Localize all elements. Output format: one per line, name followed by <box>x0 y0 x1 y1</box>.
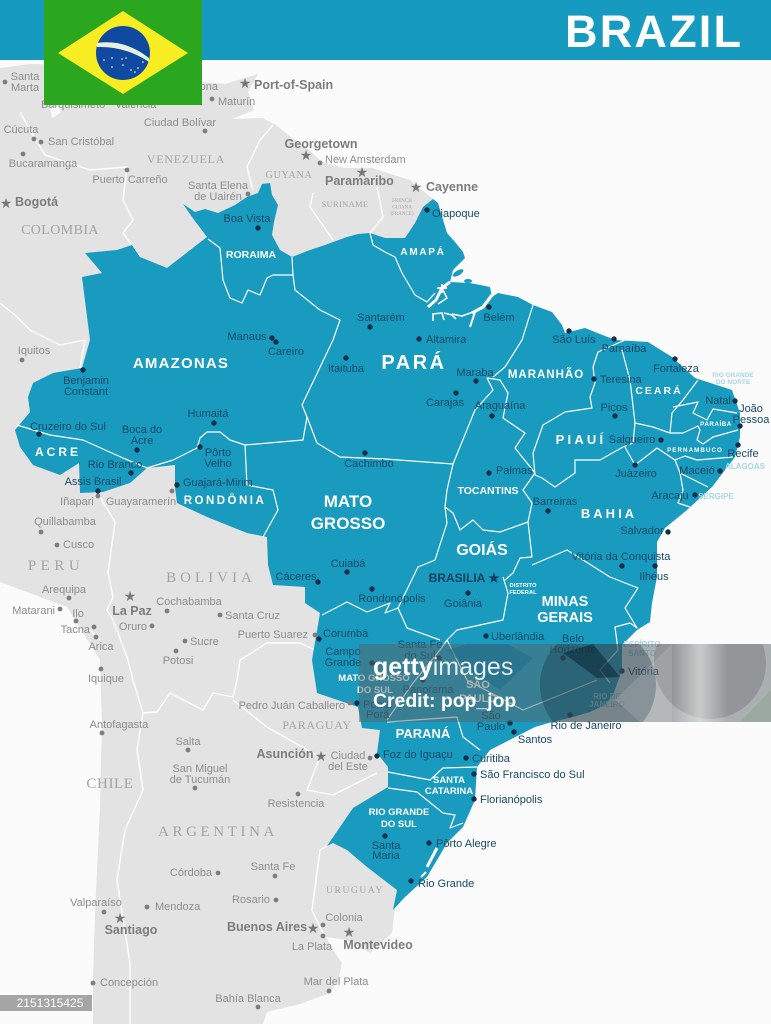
labels: neighbouring capitals: ★ <box>356 165 368 181</box>
labels: neighbouring cities: Santa Fe <box>251 861 295 873</box>
labels: Brazilian cities: Vitória da Conquista <box>572 551 671 563</box>
labels: Brazilian states: FEDERAL <box>509 590 537 596</box>
labels: neighbouring cities: Ciudad <box>331 750 365 762</box>
labels: Brazilian states: DISTRITO <box>510 583 537 589</box>
labels: neighbouring cities: de Uairén <box>194 191 242 203</box>
labels: Brazilian states: RIO DE <box>593 692 621 701</box>
labels: neighbouring country names: COLOMBIA <box>21 223 99 238</box>
labels: Brazilian states: ESPÍRITO <box>623 640 661 649</box>
labels: Brazilian cities: Santa Fe <box>398 639 442 651</box>
labels: neighbouring cities: Arequipa <box>42 584 87 596</box>
labels: Brazilian states: MINAS <box>542 594 589 610</box>
map: Brazil with state borders <box>15 183 740 910</box>
labels: neighbouring capitals: Port-of-Spain <box>254 78 333 92</box>
labels: Brazilian states: PARÁ <box>381 351 447 374</box>
labels: Brazilian cities: Juàzeiro <box>615 468 657 480</box>
labels: neighbouring cities: Mar del Plata <box>304 976 369 988</box>
labels: Brazilian cities: Manaus <box>227 331 267 343</box>
labels: Brazilian cities: Pôrto Alegre <box>436 838 497 850</box>
labels: neighbouring cities: Puerto Suarez <box>238 629 308 641</box>
labels: Brazilian cities: Pessoa <box>733 414 770 426</box>
labels: neighbouring cities: Córdoba <box>170 867 213 879</box>
Brazil land shape <box>15 183 740 910</box>
labels: neighbouring cities: Santa <box>11 71 40 83</box>
labels: Brazilian cities: Altamira <box>426 334 467 346</box>
state borders <box>17 233 738 828</box>
labels: neighbouring cities: Maturín <box>218 96 255 108</box>
labels: Brazilian cities: Santa <box>372 840 401 852</box>
labels: neighbouring cities: Bucaramanga <box>9 158 78 170</box>
labels: Brazilian cities: São Luís <box>552 334 596 346</box>
labels: neighbouring country names: PERU <box>28 558 84 574</box>
labels: Brazilian cities: Acre <box>131 435 153 447</box>
labels: neighbouring country names: FRENCH <box>392 199 412 204</box>
labels: Brazilian cities: Foz do Iguaçu <box>383 749 453 761</box>
labels: neighbouring capitals: Asunción <box>257 747 313 761</box>
labels: Brazilian cities: Recife <box>727 448 759 460</box>
labels: Brazilian cities: Corumbá <box>323 628 369 640</box>
labels: neighbouring cities: Resistencia <box>268 798 325 810</box>
labels: neighbouring capitals: ★ <box>343 925 355 941</box>
labels: neighbouring cities <box>3 71 406 1009</box>
labels: neighbouring cities: Mendoza <box>155 901 201 913</box>
labels: neighbouring capitals: ★ <box>239 76 251 92</box>
labels: neighbouring country names: BOLIVIA <box>166 570 256 586</box>
labels: Brazilian states: CATARINA <box>425 786 473 797</box>
labels: neighbouring capitals: ★ <box>114 911 126 927</box>
labels: Brazilian cities: Boca do <box>122 424 162 436</box>
labels: neighbouring cities: Iquitos <box>18 345 51 357</box>
labels: Brazilian cities: Araguaína <box>475 400 526 412</box>
labels: Brazilian states: PERNAMBUCO <box>667 447 723 454</box>
labels: Brazilian cities: Santarém <box>357 312 405 324</box>
labels: neighbouring cities: Santa Elena <box>188 180 249 192</box>
labels: neighbouring cities: Ilo <box>72 608 84 620</box>
labels: Brazilian states: RIO GRANDE <box>369 807 429 818</box>
labels: Brazilian cities: Vitória <box>628 666 660 678</box>
labels: Brazilian states: CEARÁ <box>635 384 683 397</box>
labels: Brazilian cities: Palmas <box>496 465 533 477</box>
labels: Brazilian states: ALAGOAS <box>725 462 766 471</box>
labels: neighbouring cities: New Amsterdam <box>325 154 406 166</box>
labels: Brazilian states: GOIÁS <box>456 540 508 559</box>
labels: neighbouring country names: VENEZUELA <box>147 152 225 166</box>
labels: Brazilian states: DO SUL <box>381 819 417 830</box>
labels: Brazilian cities: Santos <box>518 734 553 746</box>
labels: Brazilian states: PAULO <box>459 693 497 705</box>
labels: Brazilian cities: Curitiba <box>472 753 511 765</box>
labels: Brazilian cities: Rondonópolis <box>358 593 426 605</box>
labels: Brazilian cities: João <box>739 403 763 415</box>
labels: Brazilian states: MARANHÃO <box>508 368 584 381</box>
labels: neighbouring capitals: Georgetown <box>285 137 357 151</box>
labels: Brazilian cities: Pôrto <box>205 447 231 459</box>
labels: Brazilian cities: Belém <box>483 312 515 324</box>
labels: Brazilian cities: Cruzeiro do Sul <box>30 421 106 433</box>
labels: Brazilian states: JANEIRO <box>589 700 625 709</box>
labels: neighbouring cities: Barcelona <box>168 81 219 93</box>
labels: neighbouring cities: Santa Cruz <box>225 610 280 622</box>
labels: Brazilian states <box>35 245 766 830</box>
image id tag: 2151315425 <box>17 996 84 1010</box>
labels: neighbouring cities: Matarani <box>12 605 55 617</box>
labels: Brazilian cities: Guajará-Mirim <box>183 477 253 489</box>
labels: Brazilian cities: Constant <box>64 386 108 398</box>
labels: neighbouring capitals: Montevideo <box>343 938 413 952</box>
labels: Brazilian states: SÃO <box>466 678 490 691</box>
labels: neighbouring capitals: Cayenne <box>426 180 478 194</box>
labels: Brazilian cities: Oiapoque <box>432 208 480 220</box>
labels: Brazilian cities: Horizonte <box>549 644 597 656</box>
labels: Brazilian states: RORAIMA <box>226 249 276 261</box>
labels: Brazilian states: DO NORTE <box>716 379 751 386</box>
labels: neighbouring capitals: Bogotá <box>15 195 58 209</box>
labels: Brazilian cities: Rio Branco <box>88 459 142 471</box>
labels: neighbouring cities: La Plata <box>292 941 333 953</box>
labels: Brazilian cities: Boa Vista <box>224 213 271 225</box>
labels: neighbouring country names: CHILE <box>86 776 134 792</box>
labels: Brazilian cities: Careiro <box>268 346 304 358</box>
labels: Brazilian states: MATO GROSSO <box>338 673 410 684</box>
labels: neighbouring capitals: Santiago <box>105 923 158 937</box>
labels: Brazilian states: SERGIPE <box>698 492 734 501</box>
labels: Brazilian cities: Assis Brasil <box>65 476 121 488</box>
labels: Brazilian cities: Cáceres <box>276 571 317 583</box>
labels: Brazilian cities: São <box>481 710 501 722</box>
labels: Brazilian cities: Ponta <box>363 699 393 711</box>
labels: neighbouring cities: Colonia <box>325 912 364 924</box>
labels: neighbouring cities: Arica <box>88 641 114 653</box>
map: neighbouring countries land <box>0 64 447 1024</box>
watermark logo: gettyimages <box>373 653 513 681</box>
labels: neighbouring country names: PARAGUAY <box>282 718 352 732</box>
top banner <box>0 0 771 60</box>
labels: neighbouring cities: Rosario <box>232 894 270 906</box>
labels: neighbouring country names: GUYANA <box>265 170 313 181</box>
labels: neighbouring cities: Tacna <box>61 624 91 636</box>
labels: neighbouring capitals: Paramaribo <box>325 174 394 188</box>
labels: Brazilian cities: Goiânia <box>444 598 483 610</box>
labels: Brazilian cities: Campo <box>325 646 361 658</box>
labels: neighbouring cities: del Este <box>328 761 368 773</box>
labels: Brazilian cities: Maceió <box>679 465 715 477</box>
labels: neighbouring cities: Ciudad Bolívar <box>144 117 216 129</box>
labels: Brazilian cities: Carajas <box>426 397 464 409</box>
labels: neighbouring country names: ARGENTINA <box>158 824 278 840</box>
labels: neighbouring cities: Valencia <box>115 99 157 111</box>
labels: Brazilian cities: Uberlândia <box>491 631 545 643</box>
labels: neighbouring cities: Potosi <box>163 655 193 667</box>
labels: Brazilian cities: Humaitá <box>188 408 229 420</box>
watermark overlay shapes <box>448 644 771 722</box>
labels: Brazilian cities: Itaituba <box>328 363 365 375</box>
labels: Brazilian states: MATO <box>324 492 372 511</box>
labels: Brazilian cities: do Sul <box>404 650 436 662</box>
labels: neighbouring capitals <box>0 76 478 952</box>
watermark band <box>359 644 771 722</box>
labels: neighbouring cities: Concepción <box>100 977 158 989</box>
Amazon delta and lagoons <box>421 282 492 877</box>
labels: Brazilian cities: Belo <box>562 633 584 645</box>
labels: Brazilian cities: Paulo <box>477 721 505 733</box>
labels: Brazilian states: DO SUL <box>357 685 393 696</box>
labels: neighbouring cities: Cúcuta <box>4 124 39 136</box>
labels: neighbouring cities: Iñapari <box>60 496 94 508</box>
labels: Brazilian cities: Barreiras <box>533 496 578 508</box>
labels: Brazilian cities: Maria <box>372 850 401 862</box>
title: BRAZIL <box>565 6 741 57</box>
labels: neighbouring cities: Salta <box>175 736 201 748</box>
labels: Brazilian cities: Picos <box>601 402 628 414</box>
labels: Brazilian cities: Florianópolis <box>480 794 543 806</box>
labels: neighbouring capitals: ★ <box>307 921 319 937</box>
labels: neighbouring cities: Guayaramerín <box>106 496 176 508</box>
labels: Brazilian states: PIAUÍ <box>556 432 606 447</box>
labels: neighbouring country names: SURINAME <box>322 199 368 209</box>
labels: neighbouring cities: Valparaíso <box>70 897 122 909</box>
labels: Brazilian states: GROSSO <box>311 514 385 533</box>
labels: Brazilian cities: Parnaíba <box>602 343 647 355</box>
labels: neighbouring country names: GUIANA <box>392 206 412 210</box>
labels: neighbouring cities: Iquique <box>88 673 124 685</box>
image id tag <box>0 995 92 1011</box>
labels: Brazilian cities: Maraba <box>456 367 495 379</box>
labels: Brazilian cities <box>30 207 770 890</box>
labels: neighbouring capitals: ★ <box>124 589 136 605</box>
labels: Brazilian states: AMAZONAS <box>133 355 229 372</box>
labels: neighbouring capitals: ★ <box>0 196 12 212</box>
labels: Brazilian cities: Rio Grande <box>418 878 474 890</box>
labels: Brazilian states: SANTO <box>628 649 656 658</box>
labels: Brazilian cities: Aracaju <box>651 490 689 502</box>
labels: Brazilian states: BRASILIA <box>429 571 486 585</box>
labels: neighbouring country names: URUGUAY <box>326 886 384 896</box>
labels: neighbouring cities: Oruro <box>119 621 147 633</box>
labels: Brazilian cities: Cuiabá <box>331 558 366 570</box>
labels: Brazilian cities: Teresina <box>600 374 642 386</box>
labels: neighbouring cities: Marta <box>11 82 40 94</box>
labels: neighbouring capitals: ★ <box>300 148 312 164</box>
labels: neighbouring cities: Quillabamba <box>34 516 97 528</box>
country borders <box>0 112 383 1024</box>
labels: Brazilian states: ACRE <box>35 445 81 459</box>
labels: neighbouring cities: de Tucumán <box>170 774 230 786</box>
labels: neighbouring cities: Puerto Carreño <box>92 174 168 186</box>
labels: Brazilian states: RONDÔNIA <box>184 494 266 507</box>
labels: Brazilian cities: Rio de Janeiro <box>551 720 621 732</box>
labels: Brazilian states: RIO GRANDE <box>712 372 754 379</box>
labels: Brazilian cities: Natal <box>705 395 731 407</box>
labels: Brazilian cities: Ilhéus <box>639 571 669 583</box>
watermark credit: Credit: pop_jop <box>373 690 516 712</box>
labels: Brazilian states: SANTA <box>433 775 465 786</box>
labels: Brazilian states: BAHIA <box>581 506 637 521</box>
labels: Brazilian states: TOCANTINS <box>457 485 519 497</box>
labels: Brazilian states: PARANÁ <box>396 726 451 741</box>
labels: neighbouring cities: Cochabamba <box>156 596 223 608</box>
labels: Brazilian states: GERAIS <box>537 610 593 626</box>
labels: neighbouring capitals: ★ <box>315 749 327 765</box>
labels: neighbouring cities: Sucre <box>190 636 219 648</box>
labels: Brazilian cities: Grande <box>325 657 361 669</box>
labels: neighbouring cities: Cusco <box>63 539 94 551</box>
labels: Brazilian cities: Salvador <box>620 525 664 537</box>
labels: neighbouring capitals: La Paz <box>112 604 152 618</box>
delta islands <box>452 268 472 283</box>
icon: flag of Brazil <box>44 0 202 105</box>
labels: Brazilian cities: São Francisco do Sul <box>480 769 585 781</box>
labels: neighbouring country names <box>21 152 414 896</box>
labels: Brazilian states: ★ <box>487 569 501 587</box>
labels: Brazilian states: PARAÍBA <box>700 419 732 428</box>
labels: Brazilian states: AMAPÁ <box>400 245 446 258</box>
labels: neighbouring cities: San Miguel <box>172 763 228 775</box>
labels: Brazilian cities: Velho <box>204 458 232 470</box>
labels: neighbouring capitals: ★ <box>410 180 422 196</box>
labels: neighbouring cities: Antofagasta <box>90 719 149 731</box>
labels: neighbouring cities: Barquisimeto <box>41 99 105 111</box>
labels: neighbouring cities: San Cristóbal <box>48 136 114 148</box>
labels: neighbouring cities: Pedro Juán Caballero <box>239 700 345 712</box>
labels: neighbouring cities: Bahía Blanca <box>215 993 282 1005</box>
labels: Brazilian cities: Salgueiro <box>609 434 655 446</box>
labels: neighbouring country names: (FRANCE) <box>390 212 414 217</box>
labels: Brazilian cities: Fortaleza <box>653 363 700 375</box>
labels: neighbouring capitals: Buenos Aires <box>227 920 307 934</box>
labels: Brazilian cities: Panorama <box>403 684 454 696</box>
labels: Brazilian cities: Cachimbo <box>344 458 394 470</box>
labels: Brazilian cities: Benjamin <box>63 375 109 387</box>
labels: Brazilian cities: Porã <box>366 709 390 721</box>
